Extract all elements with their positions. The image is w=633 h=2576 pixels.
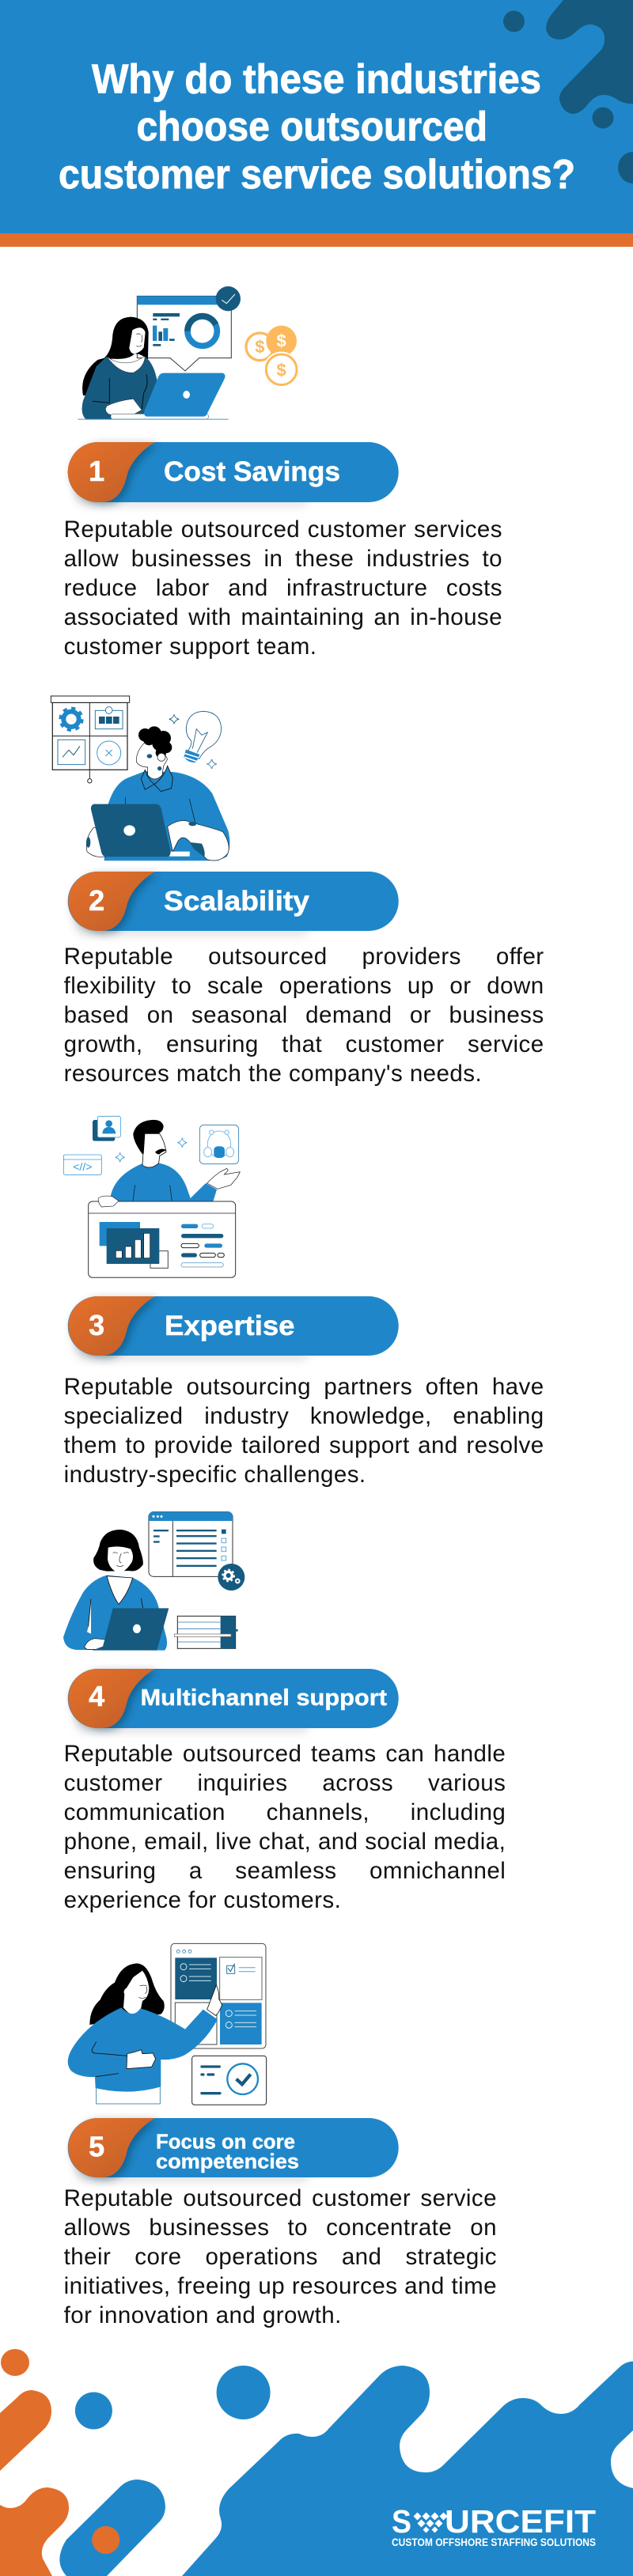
logo globe mark [413, 2512, 448, 2532]
step 5 pill: Focus on core [156, 2130, 295, 2154]
step 2 pill [68, 872, 399, 936]
paragraph: cost savings: associated with maintaining an in-house [64, 604, 502, 630]
check card [192, 2056, 267, 2105]
code card: <//> [73, 1160, 92, 1173]
paragraph: expertise [64, 1373, 544, 1487]
paragraph: multichannel support: experience for customers. [64, 1887, 341, 1913]
title: customer service solutions? [59, 152, 575, 198]
tablet dashboard [171, 1943, 266, 2048]
coins [246, 326, 299, 388]
paragraph: focus on core competencies: for innovation and growth. [64, 2302, 342, 2328]
dashboard panel [137, 296, 231, 371]
paragraph: cost savings: customer support team. [64, 633, 316, 660]
step 4 pill [68, 1669, 399, 1734]
step 1 pill: 1 [89, 455, 104, 487]
title: choose outsourced [136, 104, 487, 150]
paragraph: cost savings: allow businesses in these industries to [64, 546, 502, 571]
header band [0, 0, 633, 247]
step 4 pill: 4 [89, 1680, 104, 1712]
woman [82, 317, 157, 419]
light bulb [169, 711, 222, 769]
paragraph: scalability: resources match the company's needs. [64, 1060, 482, 1087]
paragraph: scalability [64, 943, 544, 1087]
logo: Sourcefit: CUSTOM OFFSHORE STAFFING SOLUTIONS [392, 2536, 596, 2548]
data panel [89, 1196, 236, 1277]
paragraph: multichannel support: Reputable outsourced teams can handle [64, 1741, 506, 1767]
paragraph: cost savings: reduce labor and infrastructure costs [64, 574, 502, 601]
woman [68, 1963, 222, 2104]
title: Why do these industries [92, 57, 541, 103]
paragraph: expertise: Reputable outsourcing partners often have [64, 1373, 544, 1400]
header blob decoration [503, 0, 633, 183]
step 5 pill [68, 2118, 399, 2183]
step 1 pill [68, 442, 399, 507]
paragraph: expertise: industry-specific challenges. [64, 1462, 366, 1487]
step 3 pill: 3 [89, 1309, 104, 1341]
paragraph: focus on core competencies: initiatives, freeing up resources and time [64, 2273, 497, 2299]
user card [93, 1116, 120, 1141]
illustration: man presenting a data panel [63, 1116, 240, 1277]
paragraph: focus on core competencies: allows businesses to concentrate on [64, 2215, 497, 2241]
header accent stripe [0, 233, 633, 247]
title [59, 57, 575, 198]
checklist window [149, 1512, 233, 1576]
coins: $ [255, 337, 264, 357]
settings badge [218, 1564, 244, 1591]
step 2 pill: Scalability [164, 886, 310, 917]
illustration: woman at laptop with dashboard and coins [78, 286, 299, 420]
paragraph: scalability: growth, ensuring that customer service [64, 1031, 544, 1057]
code card [63, 1155, 101, 1175]
books [174, 1616, 238, 1648]
step 2 pill: 2 [89, 884, 104, 917]
paragraph: focus on core competencies: Reputable outsourced customer service [64, 2185, 497, 2211]
illustration: woman pointing at tablet dashboard [68, 1943, 267, 2105]
paragraph: scalability: flexibility to scale operations up or down [64, 973, 544, 998]
logo: Sourcefit [392, 2503, 596, 2548]
laptop [93, 1608, 169, 1651]
paragraph: multichannel support: ensuring a seamless omnichannel [64, 1858, 506, 1884]
laptop [78, 373, 229, 420]
step 5 pill: competencies [156, 2150, 299, 2173]
paragraph: focus on core competencies: their core operations and strategic [64, 2244, 497, 2270]
woman [63, 1530, 167, 1651]
coins: $ [277, 331, 286, 351]
man [86, 726, 229, 861]
paragraph: focus on core competencies [64, 2185, 497, 2328]
paragraph: expertise: them to provide tailored support and resolve [64, 1432, 544, 1458]
paragraph: cost savings: Reputable outsourced customer services [64, 516, 502, 543]
bear card [199, 1125, 239, 1164]
man [110, 1120, 240, 1201]
paragraph: cost savings [64, 516, 502, 660]
paragraph: multichannel support [64, 1741, 506, 1913]
paragraph: expertise: specialized industry knowledge, enabling [64, 1403, 544, 1428]
step 3 pill: Expertise [165, 1311, 294, 1341]
logo: Sourcefit: URCEFIT [445, 2503, 596, 2540]
paragraph: multichannel support: communication channels, including [64, 1799, 506, 1825]
paragraph: scalability: based on seasonal demand or business [64, 1001, 544, 1028]
check badge [216, 286, 241, 311]
illustration: man with laptop, idea bulb and board [51, 696, 229, 861]
illustration: woman with laptop, checklist window and books [63, 1512, 244, 1651]
step 5 pill: 5 [89, 2131, 104, 2163]
paragraph: scalability: Reputable outsourced providers offer [64, 943, 544, 970]
paragraph: multichannel support: customer inquiries across various [64, 1770, 506, 1796]
logo: Sourcefit: S [392, 2503, 411, 2540]
laptop [91, 804, 190, 857]
paragraph: multichannel support: phone, email, live chat, and social media, [64, 1829, 506, 1855]
step 3 pill [68, 1296, 399, 1361]
footer shapes [0, 2349, 633, 2576]
step 1 pill: Cost Savings [164, 456, 340, 487]
board [51, 696, 130, 783]
coins: $ [277, 360, 286, 380]
step 4 pill: Multichannel support [141, 1685, 387, 1711]
